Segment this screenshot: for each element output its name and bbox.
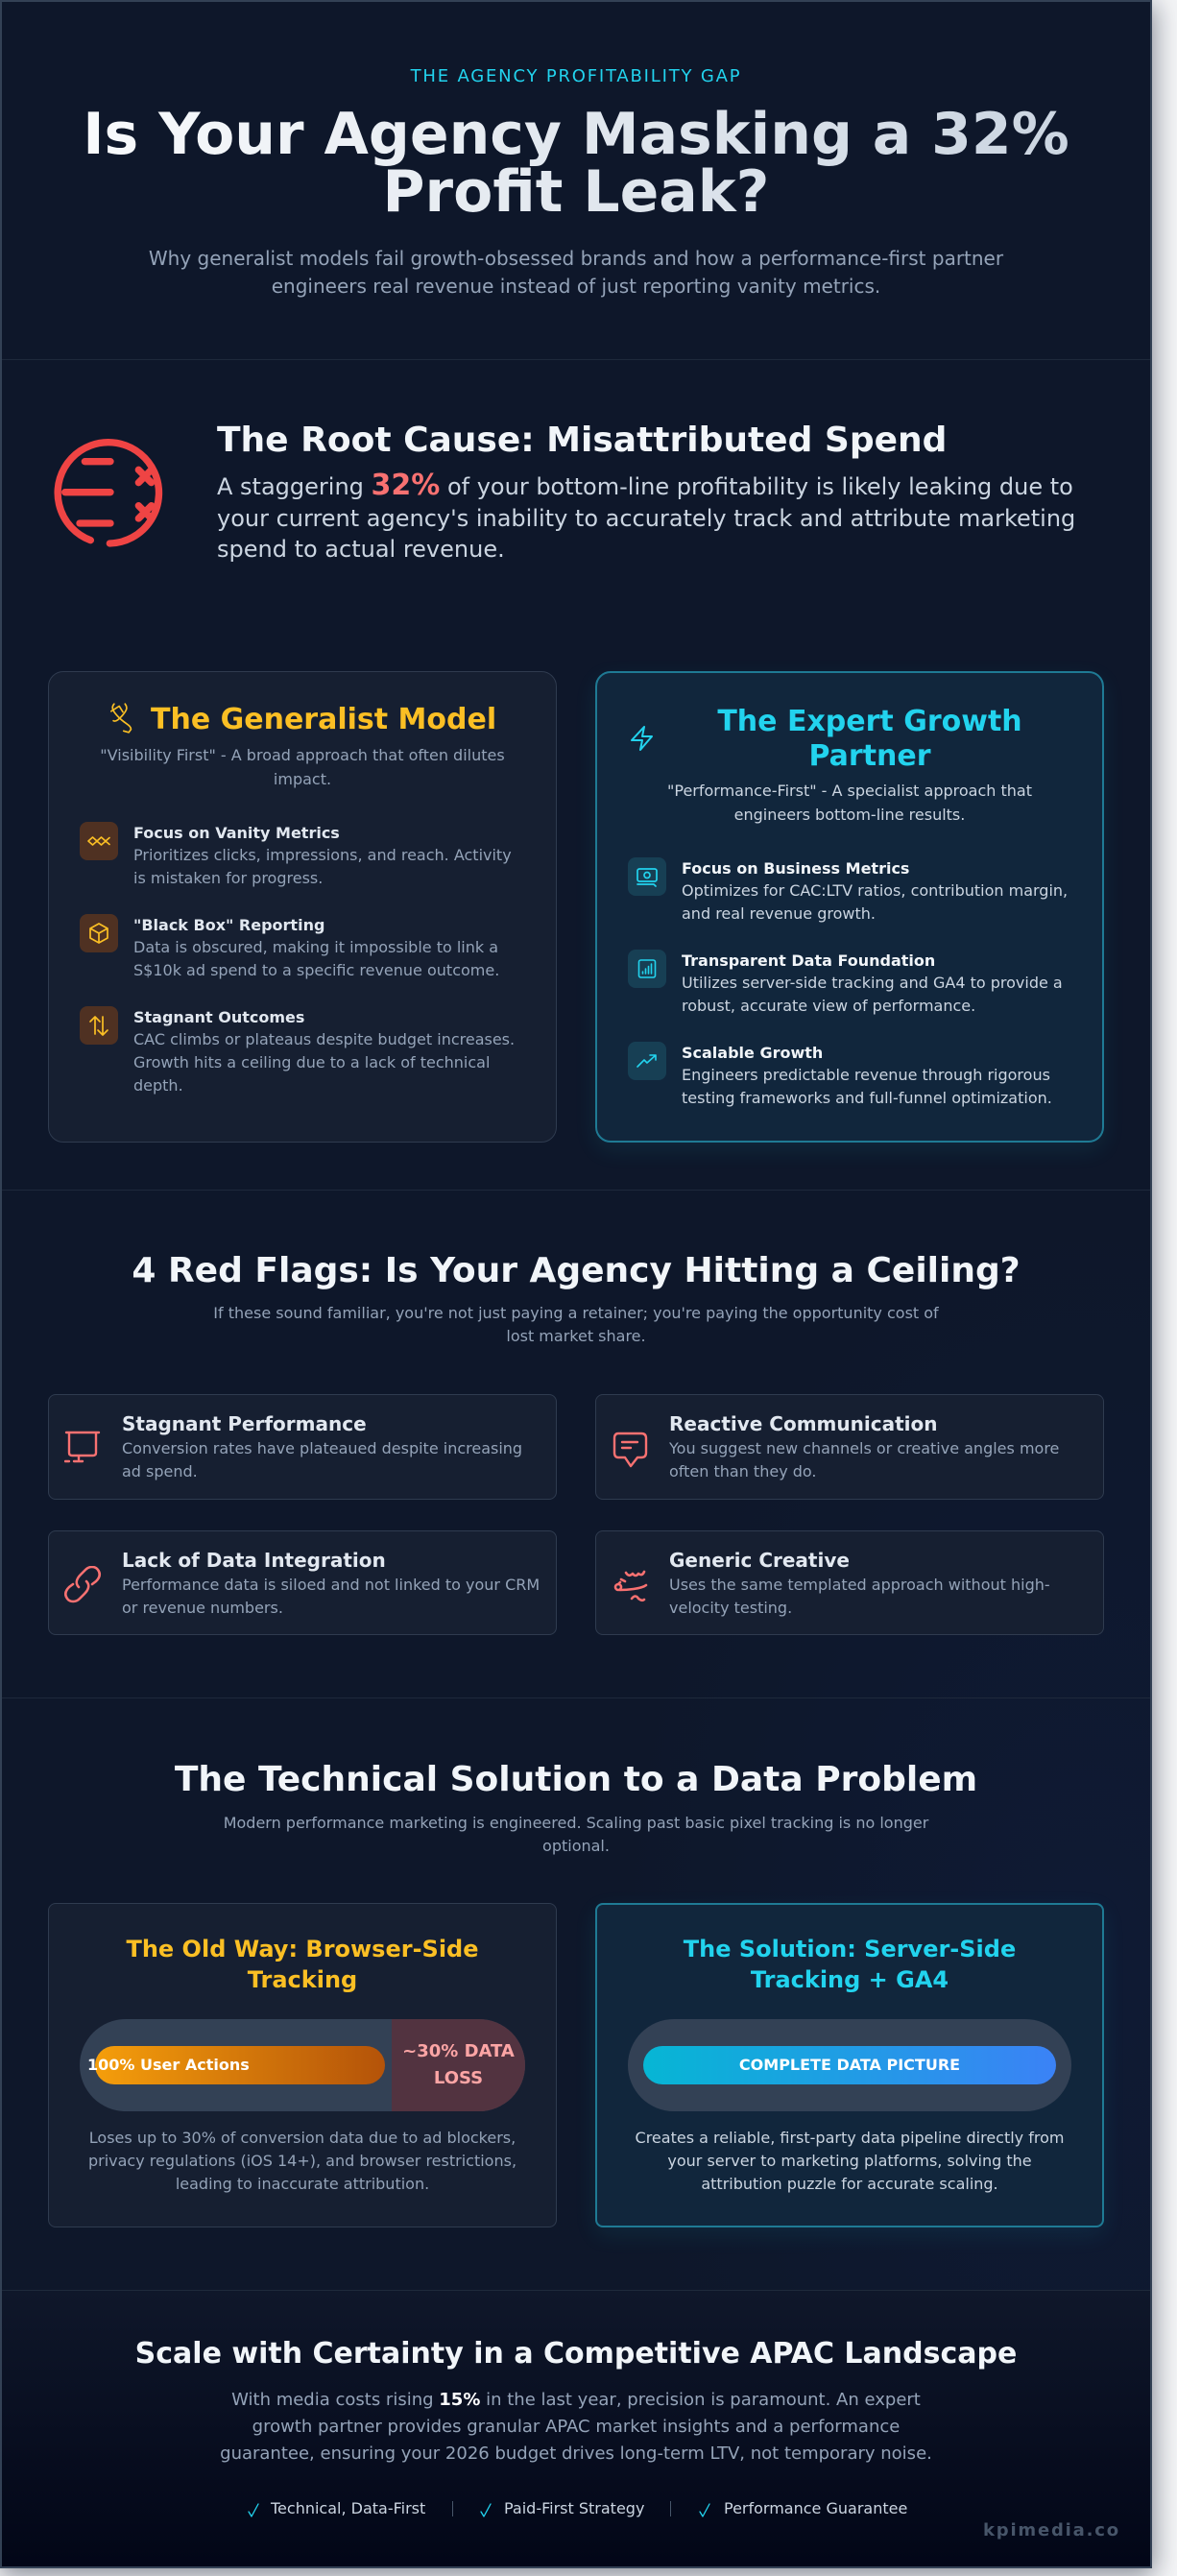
red flags intro: If these sound familiar, you're not just paying a retainer; you're paying the opportunity cost of (213, 1304, 939, 1322)
icon: chain link (64, 1566, 102, 1603)
main title: Is Your Agency Masking a 32% (83, 101, 1069, 168)
item: data foundation: Transparent Data Foundation (682, 951, 935, 970)
chart: server-side data bar (628, 2019, 1071, 2111)
item: business metrics: Focus on Business Metrics (682, 859, 909, 878)
expert heading: The Expert Growth (717, 705, 1022, 738)
flag: data integration (122, 1549, 540, 1617)
solution description (636, 2129, 1064, 2193)
item: vanity metrics: Focus on Vanity Metrics (133, 824, 340, 842)
footer background (2, 2291, 1150, 2566)
root cause paragraph: spend to actual revenue. (217, 536, 505, 563)
icon: black box (80, 914, 118, 952)
benefit: performance guarantee: Performance Guarantee (724, 2499, 907, 2517)
item: business metrics: Optimizes for CAC:LTV ratios, contribution margin, (682, 881, 1068, 900)
flag: generic creative (669, 1549, 1050, 1617)
header eyebrow: THE AGENCY PROFITABILITY GAP (411, 66, 741, 86)
panel: data integration (48, 1530, 557, 1635)
flag: stagnant performance (122, 1412, 522, 1481)
panel: stagnant performance (48, 1394, 557, 1500)
data loss segment (392, 2019, 525, 2111)
separator (670, 2501, 671, 2516)
main title (83, 101, 1069, 226)
solution description: Creates a reliable, first-party data pipeline directly from (636, 2129, 1064, 2147)
data loss label (402, 2041, 515, 2088)
icon: leaking budget circle (54, 439, 163, 547)
flag: reactive communication (669, 1412, 1059, 1481)
solution heading: Tracking + GA4 (751, 1966, 949, 1993)
generalist subtitle (100, 746, 505, 787)
icon: squiggle marks (614, 1571, 647, 1601)
item: black box reporting (133, 916, 499, 979)
technical solution heading: The Technical Solution to a Data Problem (175, 1760, 977, 1799)
item: stagnant outcomes: Growth hits a ceiling due to a lack of technical (133, 1053, 490, 1071)
root cause paragraph (217, 469, 1075, 563)
main title: Profit Leak? (383, 158, 769, 226)
old way heading: The Old Way: Browser-Side (126, 1936, 479, 1962)
icon: up down arrows (80, 1006, 118, 1045)
solution description: attribution puzzle for accurate scaling. (701, 2175, 998, 2193)
generalist heading: The Generalist Model (151, 703, 496, 736)
root cause paragraph: A staggering 32% of your bottom-line profitability is likely leaking due to (217, 469, 1073, 502)
panel: reactive communication (595, 1394, 1104, 1500)
panel: the solution (595, 1903, 1104, 2227)
expert heading: Partner (808, 739, 931, 773)
icon: lightning bolt (631, 726, 653, 751)
old way description (88, 2129, 516, 2193)
old way heading: Tracking (248, 1966, 357, 1993)
closing paragraph: With media costs rising 15% in the last year, precision is paramount. An expert (231, 2390, 921, 2410)
item: business metrics: and real revenue growth. (682, 904, 876, 923)
flag: stagnant performance: Conversion rates have plateaued despite increasing (122, 1439, 522, 1457)
flag: generic creative: velocity testing. (669, 1599, 792, 1617)
icon: bar chart (628, 950, 666, 988)
flag: reactive communication: often than they do. (669, 1462, 816, 1481)
user actions label: 100% User Actions (87, 2056, 250, 2074)
icon: vanity metrics (80, 822, 118, 860)
item: data foundation (682, 951, 1063, 1015)
complete data bar (643, 2046, 1056, 2084)
root cause heading: The Root Cause: Misattributed Spend (217, 421, 947, 460)
item: black box reporting: Data is obscured, making it impossible to link a (133, 938, 498, 956)
technical solution intro: Modern performance marketing is engineered. Scaling past basic pixel tracking is no longer (224, 1814, 928, 1832)
benefit: technical data-first: Technical, Data-First (271, 2499, 425, 2517)
red flags intro (213, 1304, 939, 1345)
flag: generic creative: Generic Creative (669, 1549, 850, 1572)
user actions bar (95, 2046, 385, 2084)
expert subtitle (667, 782, 1032, 824)
benefit: paid-first strategy: Paid-First Strategy (504, 2499, 644, 2517)
solution description: your server to marketing platforms, solving the (667, 2152, 1032, 2170)
expert subtitle: engineers bottom-line results. (734, 805, 965, 824)
item: data foundation: robust, accurate view of performance. (682, 997, 975, 1015)
technical solution intro (224, 1814, 929, 1855)
old way description: leading to inaccurate attribution. (176, 2175, 429, 2193)
item: vanity metrics: Prioritizes clicks, impressions, and reach. Activity (133, 846, 512, 864)
complete data bar: COMPLETE DATA PICTURE (739, 2056, 960, 2074)
chart: browser-side data bar (80, 2019, 525, 2111)
panel: generic creative (595, 1530, 1104, 1635)
icon: chat bubble (613, 1432, 647, 1467)
item: scalable growth: Engineers predictable revenue through rigorous (682, 1066, 1050, 1084)
flag: data integration: or revenue numbers. (122, 1599, 283, 1617)
old way description: Loses up to 30% of conversion data due to ad blockers, (89, 2129, 516, 2147)
item: data foundation: Utilizes server-side tracking and GA4 to provide a (682, 974, 1063, 992)
old way heading (126, 1936, 479, 1993)
closing paragraph (220, 2390, 932, 2464)
closing paragraph: guarantee, ensuring your 2026 budget drives long-term LTV, not temporary noise. (220, 2444, 932, 2464)
red flags heading: 4 Red Flags: Is Your Agency Hitting a Ceiling? (132, 1251, 1021, 1290)
icon: generalist scribble (110, 703, 132, 734)
root cause paragraph: your current agency's inability to accurately track and attribute marketing (217, 505, 1075, 532)
item: scalable growth: testing frameworks and full-funnel optimization. (682, 1089, 1052, 1107)
separator (452, 2501, 453, 2516)
header subtitle: Why generalist models fail growth-obsessed brands and how a performance-first partner (149, 247, 1003, 270)
flag: stagnant performance: Stagnant Performance (122, 1412, 367, 1435)
flag: data integration: Lack of Data Integration (122, 1549, 386, 1572)
item: black box reporting: "Black Box" Reporting (133, 916, 324, 934)
icon: presentation screen (64, 1431, 100, 1463)
item: stagnant outcomes (133, 1008, 515, 1095)
data loss label: ~30% DATA (402, 2041, 515, 2061)
flag: data integration: Performance data is siloed and not linked to your CRM (122, 1576, 540, 1594)
generalist subtitle: impact. (274, 770, 331, 787)
closing paragraph: growth partner provides granular APAC market insights and a performance (252, 2417, 900, 2437)
expert subtitle: "Performance-First" - A specialist approach that (667, 782, 1032, 800)
item: scalable growth: Scalable Growth (682, 1044, 823, 1062)
header subtitle (149, 247, 1004, 298)
panel: generalist model (48, 671, 557, 1143)
solution heading (684, 1936, 1016, 1993)
header subtitle: engineers real revenue instead of just reporting vanity metrics. (272, 275, 880, 298)
icon: banknote (628, 857, 666, 896)
generalist subtitle: "Visibility First" - A broad approach that often dilutes (100, 746, 505, 764)
flag: reactive communication: You suggest new channels or creative angles more (669, 1439, 1059, 1457)
panel: the old way (48, 1903, 557, 2227)
closing heading: Scale with Certainty in a Competitive APAC Landscape (135, 2337, 1017, 2371)
item: stagnant outcomes: CAC climbs or plateaus despite budget increases. (133, 1030, 515, 1048)
item: stagnant outcomes: Stagnant Outcomes (133, 1008, 304, 1026)
data loss label: LOSS (434, 2068, 483, 2088)
panel: expert growth partner (595, 671, 1104, 1143)
icon: trending up (628, 1042, 666, 1080)
flag: stagnant performance: ad spend. (122, 1462, 198, 1481)
flag: reactive communication: Reactive Communication (669, 1412, 937, 1435)
brand watermark: kpimedia.co (983, 2520, 1120, 2540)
item: vanity metrics (133, 824, 512, 887)
item: business metrics (682, 859, 1068, 923)
flag: generic creative: Uses the same templated approach without high- (669, 1576, 1050, 1594)
red flags intro: lost market share. (506, 1327, 646, 1345)
item: stagnant outcomes: depth. (133, 1076, 183, 1095)
technical solution intro: optional. (542, 1837, 610, 1855)
item: black box reporting: S$10k ad spend to a specific revenue outcome. (133, 961, 499, 979)
item: vanity metrics: is mistaken for progress. (133, 869, 323, 887)
expert heading (717, 705, 1022, 773)
old way description: privacy regulations (iOS 14+), and browser restrictions, (88, 2152, 516, 2170)
solution heading: The Solution: Server-Side (684, 1936, 1016, 1962)
item: scalable growth (682, 1044, 1052, 1107)
